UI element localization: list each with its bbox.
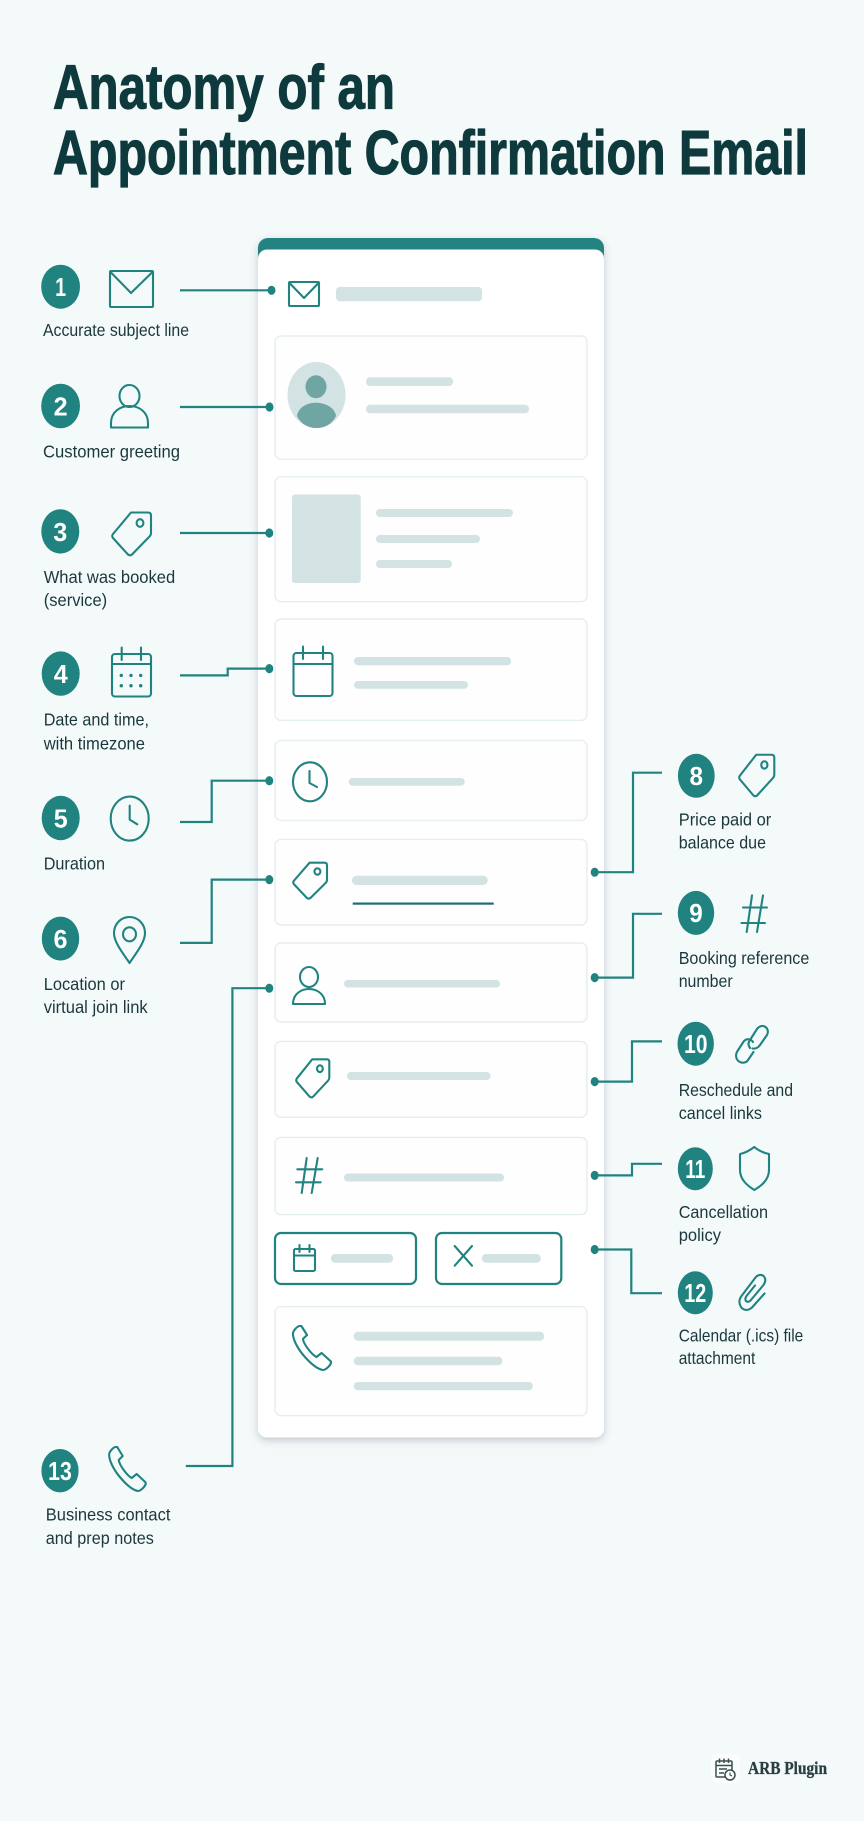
connector 10 [591,1041,662,1086]
badge 4 [42,651,80,696]
label 13 [46,1505,171,1548]
icon: shield [740,1147,769,1190]
hash box [275,1137,587,1215]
reference box [275,943,587,1022]
icon: price tag [739,755,774,796]
icon: calendar [112,648,151,696]
label 3: (service) [44,590,107,610]
label 9 [679,948,809,991]
connector 5 [180,776,273,822]
badge 9 [678,891,714,935]
connector 3 [180,528,273,538]
label 4 [43,710,149,753]
logo wordmark: ARB Plugin [748,1758,827,1778]
label 9: Booking reference [679,948,809,968]
badge 2 [41,384,80,428]
icon: hash [742,895,767,932]
label 10: Reschedule and [679,1080,793,1100]
callout 4: date and time [42,648,273,753]
badge 11 [678,1147,713,1190]
badge 9: 9 [689,898,703,928]
label 4: with timezone [43,733,145,753]
label 8: balance due [679,833,766,853]
label 12: attachment [679,1348,755,1368]
badge 5 [42,796,80,840]
badge 8 [678,754,715,798]
icon: tag [112,512,151,555]
callout 11: cancellation policy [591,1147,769,1245]
callout 1: subject line [41,265,276,340]
badge 13 [41,1449,79,1492]
badge 5: 5 [54,804,68,834]
label 11 [679,1202,768,1245]
button: cancel [436,1233,561,1284]
connector 6 [180,875,273,943]
label 3: What was booked [44,567,175,587]
callout 6: location [42,875,273,1017]
callout 3: service [41,509,273,610]
badge 3: 3 [53,517,67,547]
badge 2: 2 [54,392,68,422]
contact box [275,1307,587,1416]
icon: person [111,385,148,428]
label 6: Location or [44,974,125,994]
icon: clock [111,797,149,841]
label 4: Date and time, [44,710,149,730]
badge 1: 1 [55,272,66,302]
callout 13: business contact [41,984,273,1548]
badge 12 [678,1271,713,1314]
label 10 [679,1080,793,1123]
label 5: Duration [44,853,105,873]
label 10: cancel links [679,1103,762,1123]
connector 1 [180,286,276,295]
label 11: Cancellation [679,1202,768,1222]
label 13: and prep notes [46,1528,154,1548]
label 11: policy [679,1225,721,1245]
badge 6 [42,917,79,961]
label 2: Customer greeting [43,441,180,461]
connector 13 [186,984,273,1466]
badge 8: 8 [690,761,703,791]
logo icon [711,1754,740,1783]
badge 13: 13 [48,1456,72,1486]
callout 8: price [591,754,774,877]
badge 3 [41,509,79,554]
callout 2: greeting [41,384,274,461]
service box [275,477,587,602]
badge 4: 4 [54,659,68,689]
callout 5: duration [42,776,273,873]
label 13: Business contact [46,1505,171,1525]
callout 12: calendar file [591,1245,803,1368]
price box [275,839,587,925]
icon: link [736,1026,768,1063]
icon: phone [109,1447,146,1491]
date box [275,619,587,720]
icon: envelope [110,271,153,307]
callout 10: reschedule links [591,1022,793,1123]
policy box [275,1041,587,1117]
label 3 [44,567,175,610]
title [53,54,808,188]
title: Anatomy of an [53,54,395,122]
footer logo [711,1754,827,1783]
button: add to calendar [275,1233,416,1284]
label 1: Accurate subject line [43,320,189,340]
label 6 [44,974,148,1017]
icon: paperclip [739,1275,765,1310]
connector 8 [591,773,662,877]
badge 10 [678,1022,714,1066]
badge 1 [41,265,80,309]
badge 10: 10 [684,1029,707,1059]
label 6: virtual join link [44,997,148,1017]
greeting box [275,336,587,459]
connector 11 [591,1164,662,1180]
badge 11: 11 [685,1154,705,1184]
badge 6: 6 [54,924,68,954]
label 8 [679,809,771,853]
label 8: Price paid or [679,809,771,829]
label 12: Calendar (.ics) file [679,1325,803,1345]
connector 2 [180,402,274,412]
connector 4 [180,664,273,675]
duration box [275,740,587,820]
label 9: number [679,971,733,991]
connector 12 [591,1245,662,1293]
label 12 [679,1325,803,1368]
panel: email mockup [258,238,604,1438]
subject row [289,282,482,306]
card frame [258,238,604,1438]
connector 9 [591,914,662,982]
callout 9: booking reference [591,891,809,991]
badge 12: 12 [684,1278,706,1308]
icon: pin [114,917,145,963]
